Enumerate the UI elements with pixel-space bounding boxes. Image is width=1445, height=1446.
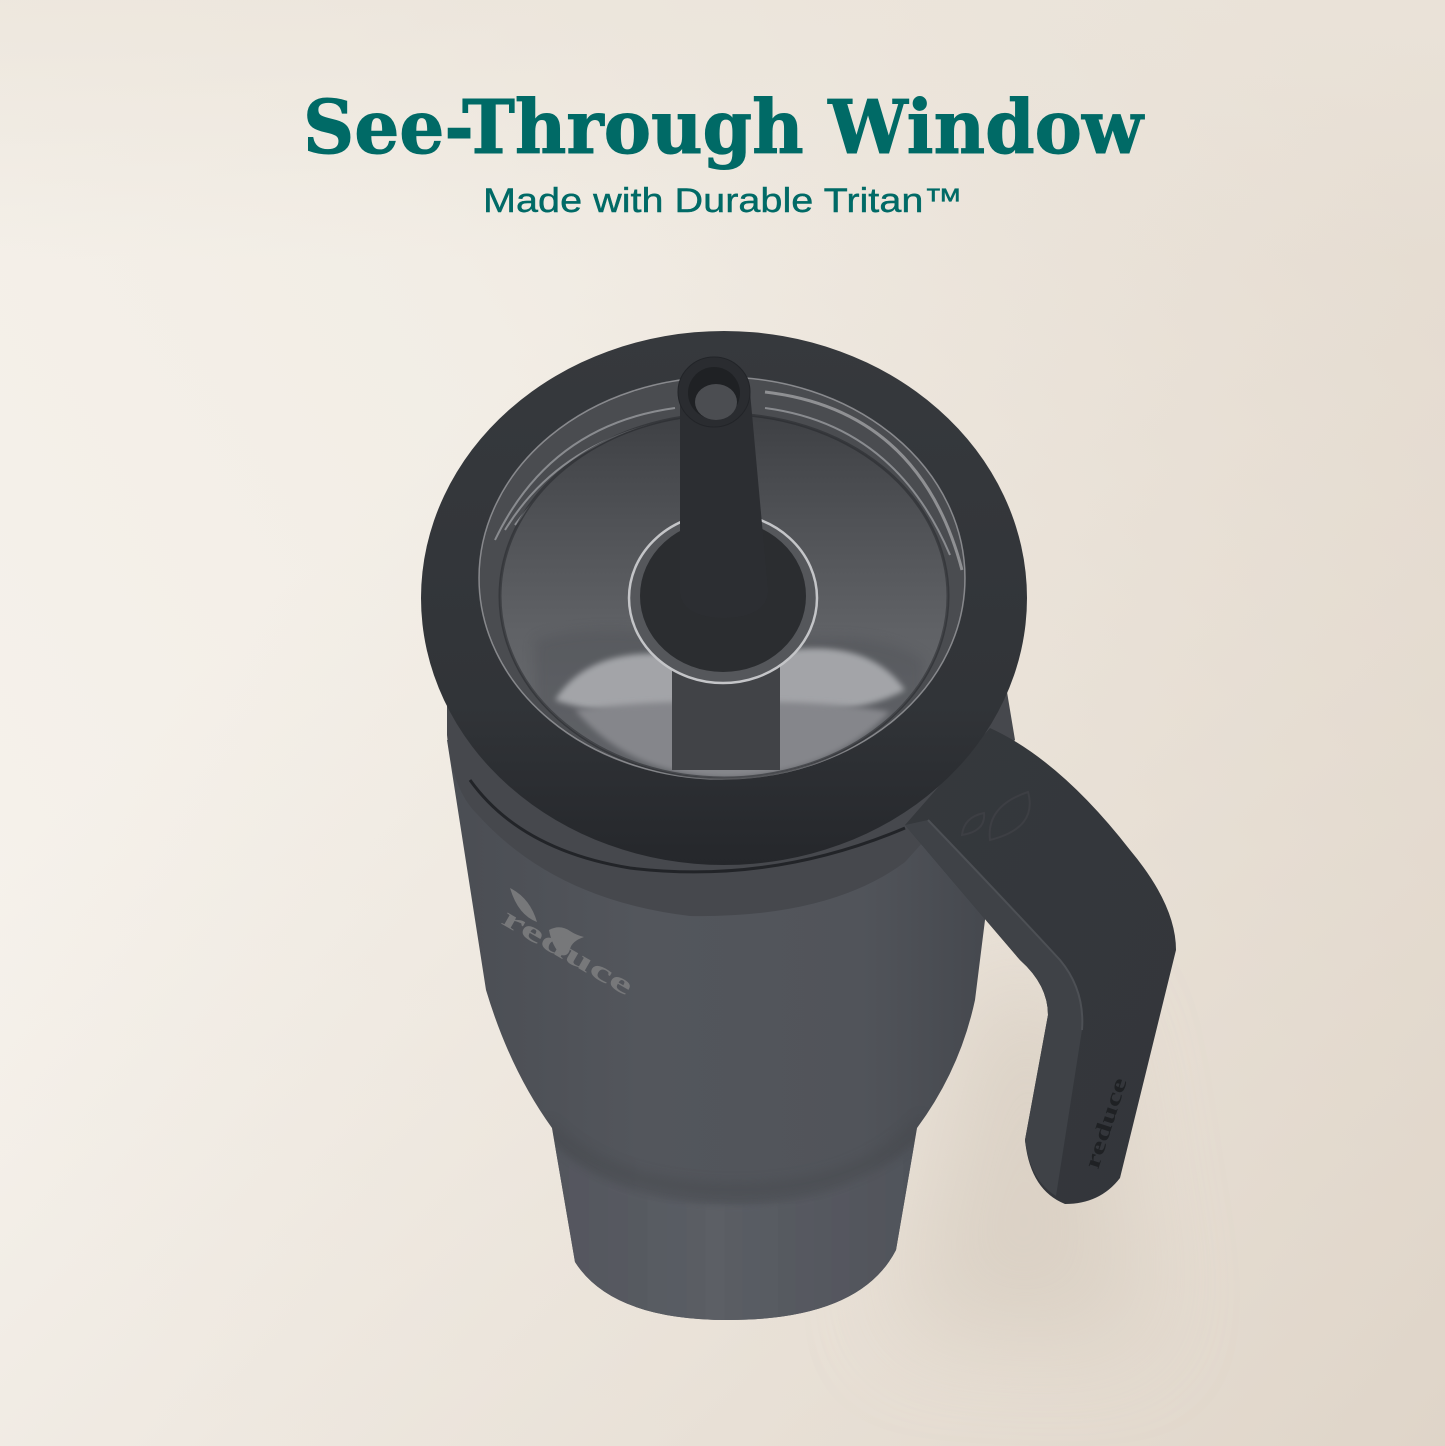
handle edge highlight: [928, 820, 1082, 1030]
brand logo on body: [496, 888, 638, 1002]
tumbler: [421, 331, 1176, 1330]
straw: [680, 392, 768, 618]
handle inner face: [905, 820, 1082, 1196]
straw reflection: [672, 660, 780, 770]
collar seam: [470, 780, 905, 872]
lid rim: [421, 331, 1027, 865]
title: See-Through Window: [303, 85, 1145, 171]
handle brand mark: reduce: [1079, 1074, 1132, 1172]
subtitle: Made with Durable Tritan™: [483, 182, 963, 220]
tumbler lower section: [540, 1120, 930, 1330]
handle leaf mark: [962, 792, 1030, 840]
handle: [905, 728, 1176, 1204]
see-through window: [479, 377, 965, 800]
tumbler body: [447, 740, 1000, 1320]
window ring: [479, 377, 965, 779]
brand logo on body: reduce: [496, 902, 638, 1002]
window threads: [495, 408, 950, 570]
light reflection: [555, 648, 905, 716]
collar band: [447, 680, 1015, 916]
straw grommet: [629, 513, 817, 683]
inner disc: [500, 414, 948, 778]
